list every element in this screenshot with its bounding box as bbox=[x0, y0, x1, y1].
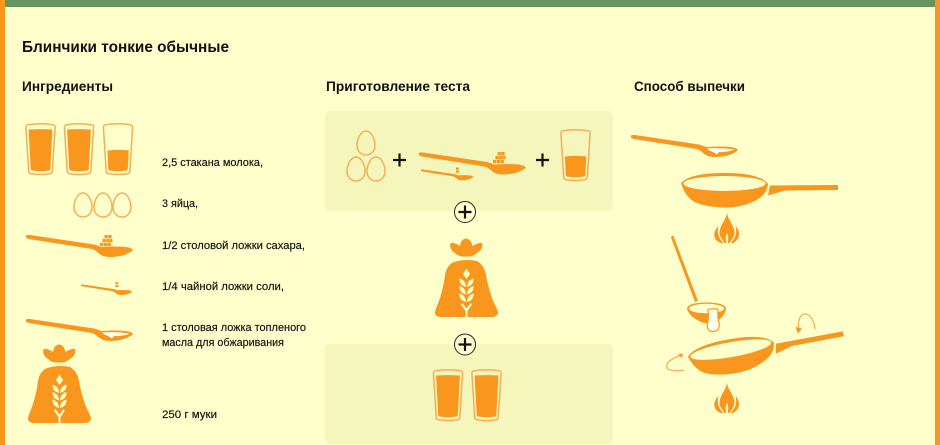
icon: tablespoon of butter bbox=[26, 319, 133, 341]
panel: baking method bbox=[631, 135, 847, 413]
label: butter bbox=[162, 322, 306, 349]
icon: tablespoon of sugar bbox=[26, 235, 133, 257]
icon: part glass of milk bbox=[561, 130, 590, 180]
heading: batter preparation: Приготовление теста bbox=[326, 78, 470, 94]
icon: plus bbox=[536, 154, 549, 166]
icon: flame bbox=[714, 213, 739, 243]
heading: baking method: Способ выпечки bbox=[634, 78, 745, 94]
arrow: tilt motion bbox=[796, 314, 815, 334]
label: sugar: 1/2 столовой ложки сахара, bbox=[162, 240, 305, 252]
label: butter: масла для обжаривания bbox=[162, 337, 284, 349]
panel: batter step three bbox=[325, 344, 613, 444]
icon: flame bbox=[714, 383, 739, 413]
icon: flour sack bbox=[435, 238, 498, 318]
arrow: swirl motion bbox=[667, 354, 684, 371]
label: salt: 1/4 чайной ложки соли, bbox=[162, 281, 284, 293]
title: Блинчики тонкие обычные bbox=[22, 39, 229, 56]
icon: tilted frying pan bbox=[686, 320, 847, 381]
icon: ladle pouring batter bbox=[671, 236, 726, 332]
icon: plus bbox=[393, 154, 406, 166]
icon: spoon of butter bbox=[631, 135, 738, 157]
label: butter: 1 столовая ложка топленого bbox=[162, 322, 306, 334]
icon: three eggs bbox=[74, 193, 131, 217]
icon: frying pan bbox=[681, 173, 838, 208]
label: milk: 2,5 стакана молока, bbox=[162, 157, 263, 169]
icon: two glasses of milk bbox=[433, 370, 501, 420]
icon: circled plus bbox=[454, 202, 476, 222]
icon: flour sack bbox=[28, 344, 91, 424]
icon: circled plus bbox=[454, 334, 476, 355]
icon: teaspoon of salt bbox=[81, 282, 132, 295]
panel: ingredients bbox=[26, 124, 306, 424]
icon: milk glasses bbox=[26, 124, 133, 174]
label: flour: 250 г муки bbox=[162, 409, 217, 421]
icon: eggs bbox=[347, 131, 385, 181]
icon: spoons with sugar and salt bbox=[419, 152, 526, 180]
panel: batter step one bbox=[325, 111, 613, 211]
heading: ingredients: Ингредиенты bbox=[22, 78, 113, 94]
label: eggs: 3 яйца, bbox=[162, 198, 198, 210]
